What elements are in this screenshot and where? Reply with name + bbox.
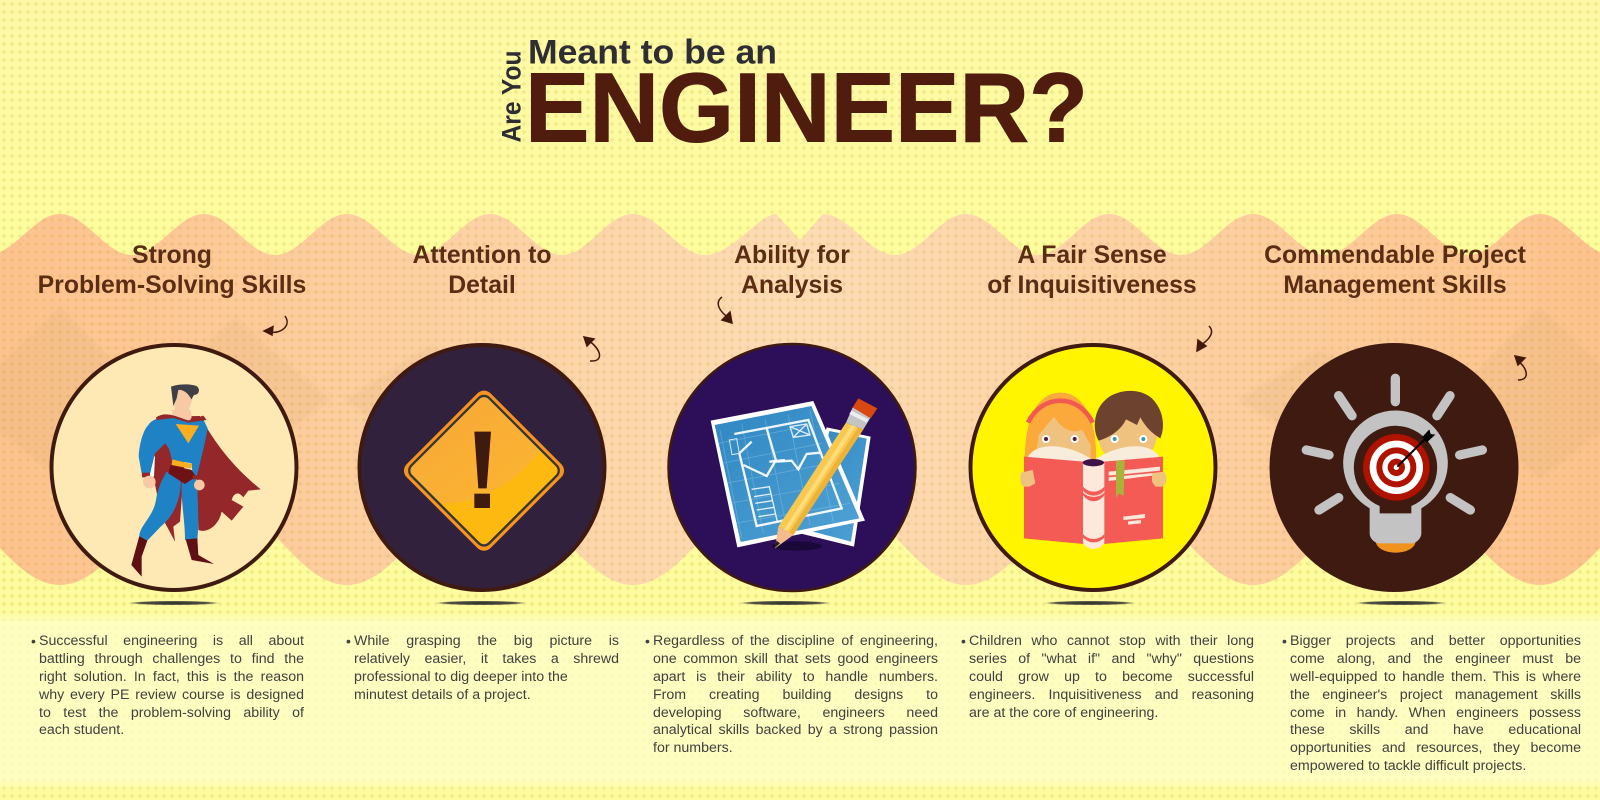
heading: project management (1264, 242, 1526, 298)
text block: project management: well-equipped to handle them. This is where (1290, 669, 1581, 685)
text block: problem solving: why every PE review course is designed (39, 687, 304, 703)
text block: problem solving: to test the problem-solving ability of (39, 705, 304, 721)
text block: ability for analysis: one common skill that sets good engineers (653, 651, 938, 667)
shadow under circle 5 (1355, 601, 1447, 605)
text block: problem solving: right solution. In fact, this is the reason (39, 669, 304, 685)
heading: attention to detail: Detail (448, 272, 516, 298)
text block: attention to detail (346, 633, 619, 703)
text block: attention to detail: While grasping the big picture is (354, 633, 619, 649)
heading: project management: Management Skills (1283, 272, 1507, 298)
shadow under circle 1 (128, 601, 220, 605)
title line: ENGINEER?: ENGINEER? (525, 52, 1088, 162)
text block: problem solving (31, 633, 304, 738)
text block: inquisitiveness: series of "what if" and "why" questions (969, 651, 1254, 667)
arrow 5 (1515, 356, 1526, 380)
circle icon: children reading (970, 345, 1216, 590)
text block: inquisitiveness: Children who cannot stop with their long (969, 633, 1254, 649)
text block: attention to detail: relatively easier, it takes a shrewd (354, 651, 619, 667)
text block: project management (1282, 633, 1581, 774)
text: • (31, 633, 36, 649)
text block: attention to detail: minutest details of a project. (354, 687, 531, 703)
text: • (645, 633, 650, 649)
title (496, 34, 1088, 162)
heading: attention to detail (412, 242, 552, 298)
title line: Are You: Are You (496, 50, 526, 142)
arrow 4 (1197, 326, 1212, 351)
text block: inquisitiveness: could grow up to become successful (969, 669, 1254, 685)
text block: project management: the engineer's project management skills (1290, 687, 1581, 703)
text block: project management: Bigger projects and better opportunities (1290, 633, 1581, 649)
heading: inquisitiveness: A Fair Sense (1017, 242, 1167, 269)
text block: inquisitiveness (961, 633, 1254, 721)
text block: project management: opportunities and resources, they become (1290, 740, 1581, 756)
heading: problem solving (38, 242, 306, 298)
icon: superhero figure (131, 384, 261, 577)
text: • (1282, 633, 1287, 649)
text block: inquisitiveness: are at the core of engineering. (969, 705, 1158, 721)
text: • (961, 633, 966, 649)
icon: light bulb with target (1306, 378, 1482, 553)
text block: ability for analysis: developing software, engineers need (653, 705, 938, 721)
text block: project management: come in handy. When engineers possess (1290, 705, 1581, 721)
text block: ability for analysis: From creating building designs to (653, 687, 938, 703)
text block: inquisitiveness: engineers. Inquisitiveness and reasoning (969, 687, 1254, 703)
text block: problem solving: battling through challenges to find the (39, 651, 304, 667)
heading: attention to detail: Attention to (412, 242, 552, 269)
heading: ability for analysis (734, 242, 850, 298)
heading: problem solving: Problem-Solving Skills (38, 272, 306, 298)
text block: project management: empowered to tackle difficult projects. (1290, 758, 1526, 774)
heading: inquisitiveness (987, 242, 1197, 298)
arrow 1 (264, 316, 287, 335)
text block: ability for analysis: for numbers. (653, 740, 733, 756)
bottom text panel (0, 612, 1600, 790)
arrow 3 (718, 297, 732, 323)
title line: Meant to be an: Meant to be an (528, 34, 777, 72)
text block: ability for analysis (645, 633, 938, 756)
text block: project management: come along, and the engineer must be (1290, 651, 1581, 667)
circle icon: blueprint and pencil (668, 344, 916, 591)
text block: project management: these skills and have educational (1290, 722, 1581, 738)
circle icon: warning sign (360, 345, 604, 590)
text block: ability for analysis: Regardless of the discipline of engineering, (653, 633, 938, 649)
text block: ability for analysis: analytical skills backed by a strong passion (653, 722, 938, 738)
text: • (346, 633, 351, 649)
text block: problem solving: Successful engineering is all about (39, 633, 304, 649)
heading: ability for analysis: Ability for (734, 242, 850, 269)
text block: attention to detail: professional to dig deeper into the (354, 669, 568, 685)
icon: warning diamond (404, 390, 564, 551)
circle icon: superhero (52, 345, 296, 590)
icon: children reading a book (1020, 391, 1167, 549)
circle icon: light bulb and target (1270, 343, 1518, 592)
shadow under circle 2 (435, 601, 527, 605)
wavy orange band (0, 214, 1600, 585)
text block: ability for analysis: apart is their ability to handle numbers. (653, 669, 938, 685)
heading: ability for analysis: Analysis (741, 272, 843, 298)
shadow under circle 3 (739, 601, 831, 605)
heading: problem solving: Strong (132, 242, 212, 269)
shadow under circle 4 (1044, 601, 1136, 605)
heading: inquisitiveness: of Inquisitiveness (987, 272, 1197, 298)
icon: blueprint and pencil drawing (711, 398, 877, 551)
arrow 2 (584, 337, 600, 361)
text block: problem solving: each student. (39, 722, 124, 738)
heading: project management: Commendable Project (1264, 242, 1526, 269)
